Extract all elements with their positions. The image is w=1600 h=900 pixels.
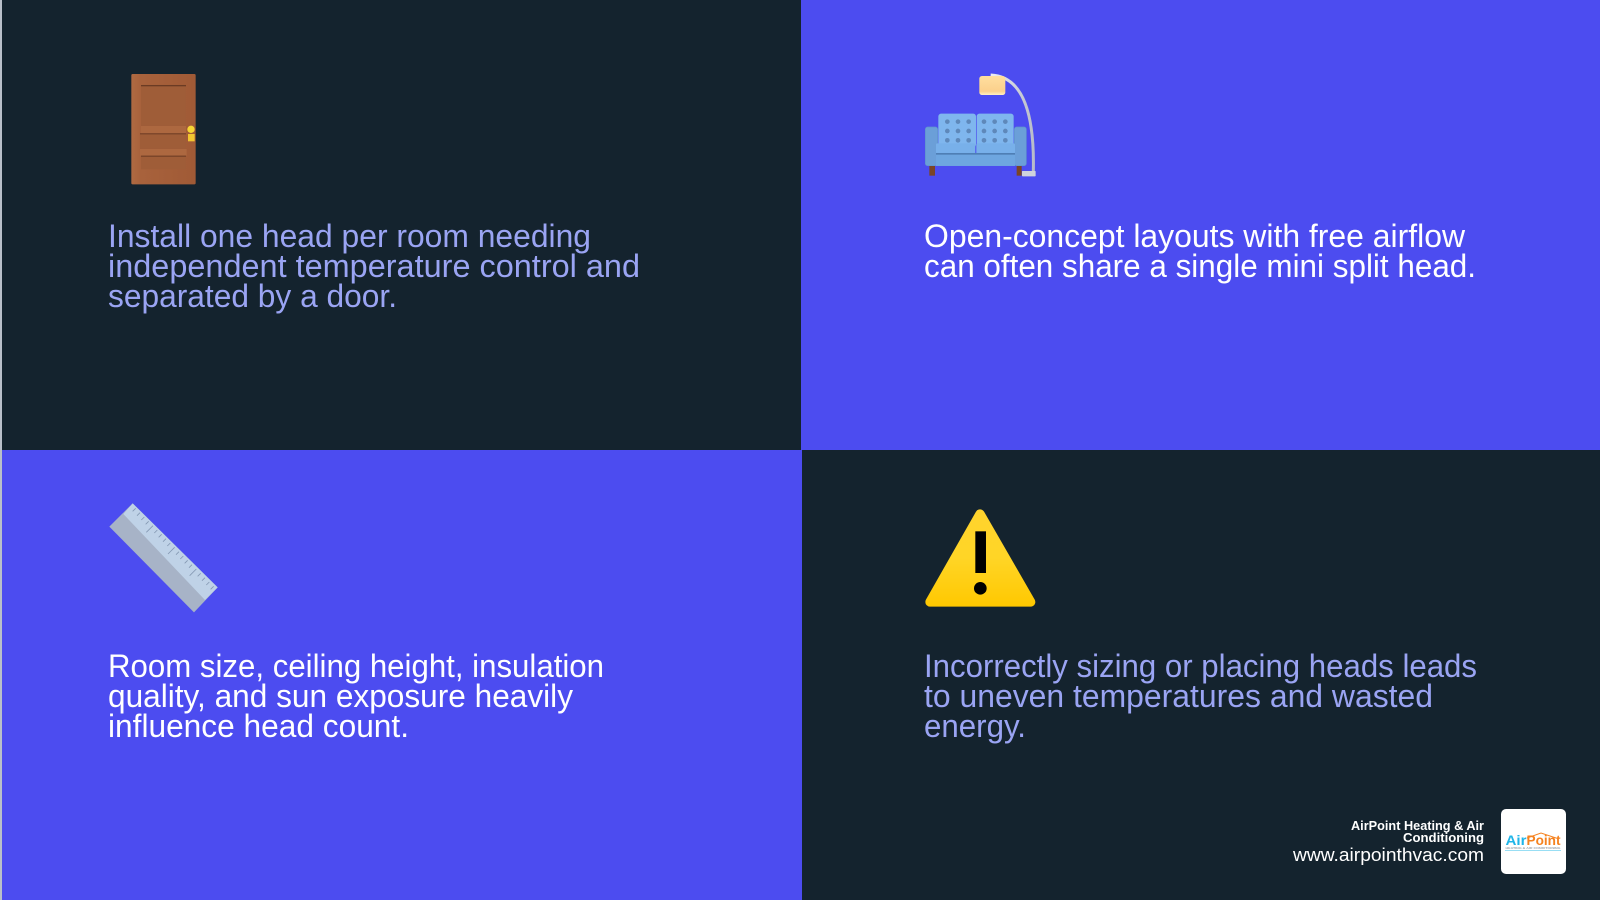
panel: sizing warning <box>802 450 1600 900</box>
footer: company name and website: AirPoint Heating & Air <box>1351 819 1484 833</box>
text: sizing warning: to uneven temperatures and wasted <box>924 678 1433 714</box>
text: sizing warning: Incorrectly sizing or placing heads leads <box>924 648 1477 684</box>
text: room factors: influence head count. <box>108 708 409 744</box>
logo: AirPoint badge: Point <box>1526 832 1561 848</box>
text: room factors <box>108 648 604 744</box>
panel: open-concept layouts <box>801 0 1600 450</box>
text: room factors: quality, and sun exposure heavily <box>108 678 573 714</box>
logo: AirPoint badge: Air <box>1506 832 1527 848</box>
footer: company name and website <box>1292 819 1484 865</box>
text: sizing warning <box>924 648 1477 744</box>
text: open-concept layouts: can often share a single mini split head. <box>924 248 1476 284</box>
panel: one head per room <box>2 0 801 450</box>
text: open-concept layouts <box>924 218 1476 284</box>
text: room factors: Room size, ceiling height, insulation <box>108 648 604 684</box>
text: one head per room: separated by a door. <box>108 278 397 314</box>
icon: ruler <box>109 503 218 612</box>
text: one head per room <box>108 218 640 314</box>
text: one head per room: Install one head per room needing <box>108 218 591 254</box>
text: open-concept layouts: Open-concept layouts with free airflow <box>924 218 1466 254</box>
icon: door <box>131 74 196 184</box>
panel: room factors <box>2 450 802 900</box>
icon: sofa and floor lamp <box>925 75 1036 176</box>
logo: AirPoint badge <box>1501 809 1566 874</box>
icon: warning triangle <box>930 514 1031 602</box>
footer: company name and website: www.airpointhvac.com <box>1292 845 1484 865</box>
logo: AirPoint badge: HEATING & AIR CONDITIONING <box>1506 846 1561 850</box>
text: sizing warning: energy. <box>924 708 1026 744</box>
footer: company name and website: Conditioning <box>1403 831 1484 845</box>
text: one head per room: independent temperature control and <box>108 248 640 284</box>
